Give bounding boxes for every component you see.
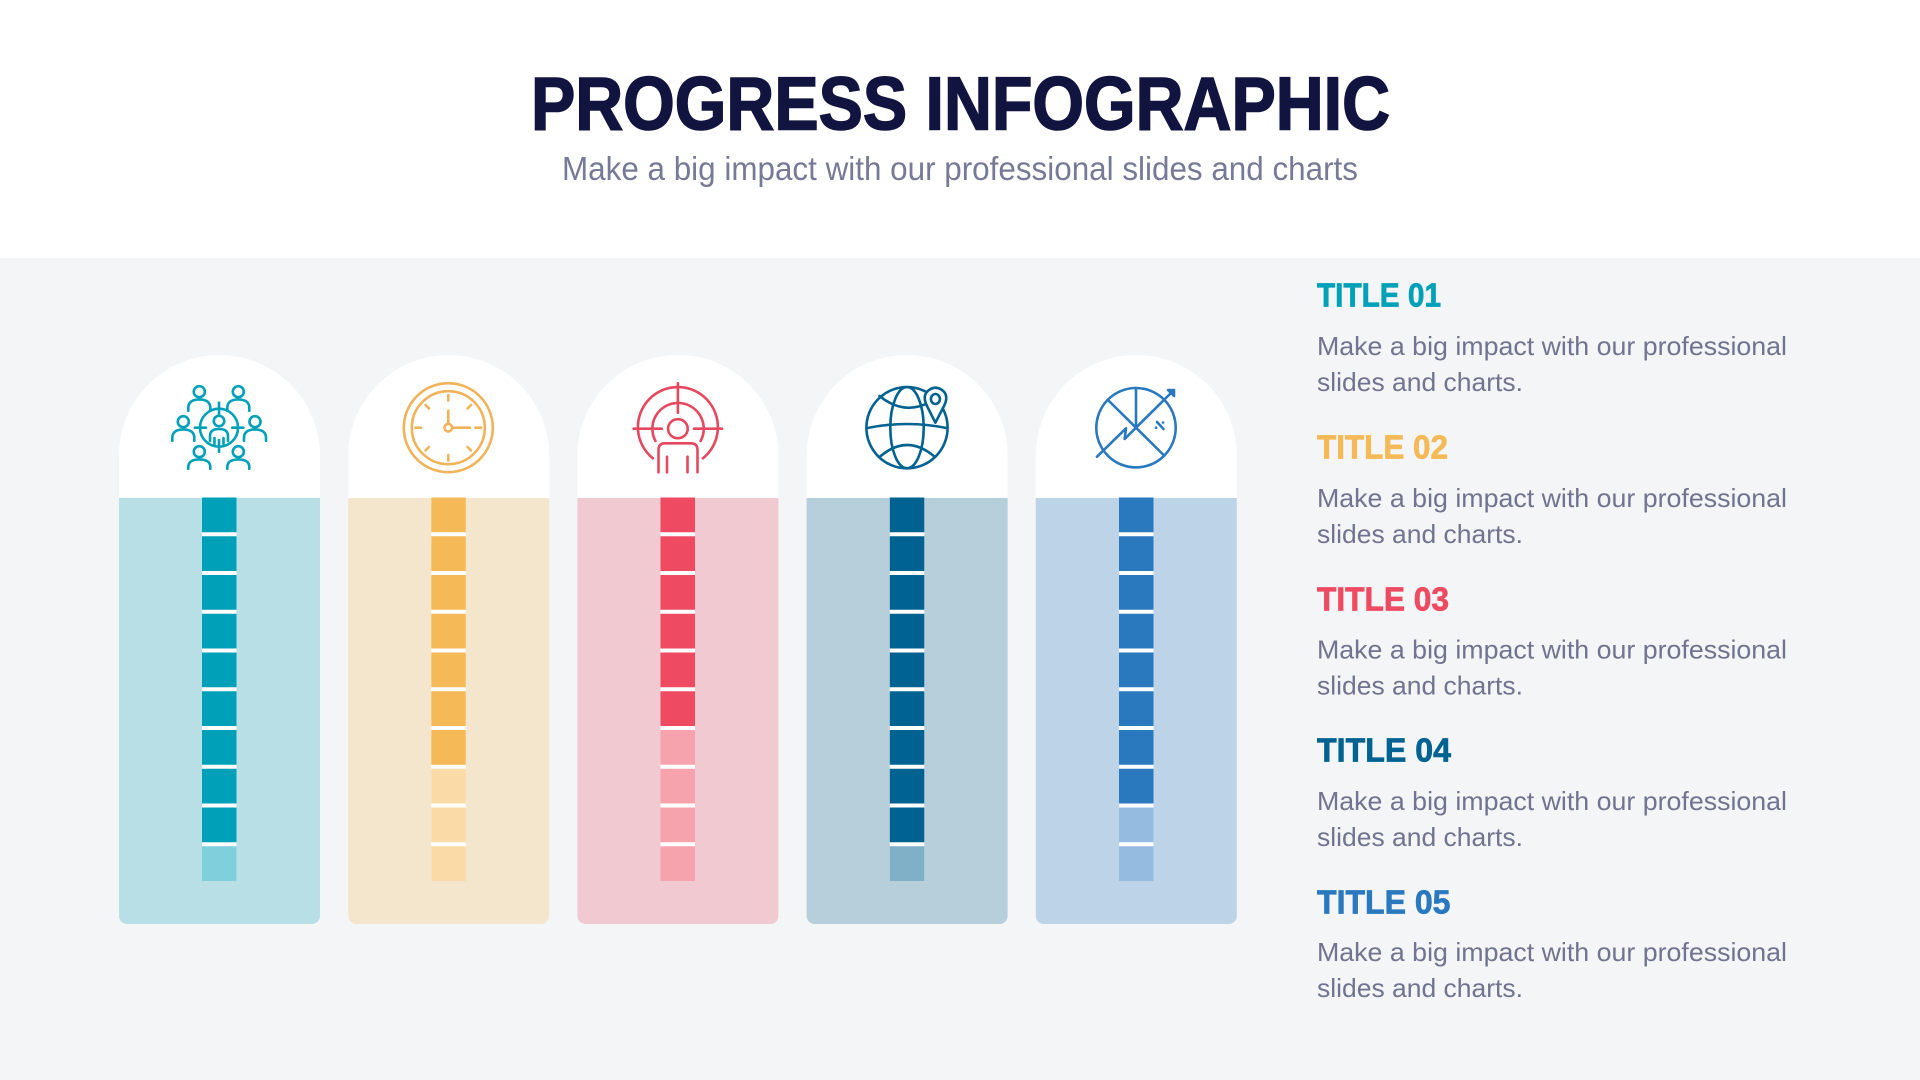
icon: target person [634,383,722,472]
legend item: title 01: TITLE 01 [1317,277,1441,314]
legend item: title 01: Make a big impact with our professional [1317,331,1787,361]
legend item: title 03 [1317,581,1787,700]
icon: globe with pin [866,387,948,468]
legend item: title 02: Make a big impact with our professional [1317,483,1787,513]
title: PROGRESS INFOGRAPHIC [531,62,1390,146]
legend item: title 01: slides and charts. [1317,367,1523,397]
legend item: title 01 [1317,277,1787,397]
legend item: title 02: TITLE 02 [1317,429,1448,466]
icon: clock [404,383,493,472]
subtitle: Make a big impact with our professional slides and charts [562,150,1358,187]
progress bar: column 4, 9 of 10 [890,498,924,881]
progress bar: column 3, 6 of 10 [660,498,695,881]
background band [0,258,1920,1080]
legend item: title 03: slides and charts. [1317,670,1523,700]
panel: column 4 [807,355,1008,924]
panel: column 5 [1036,355,1237,924]
progress bar: column 2, 7 of 10 [431,498,466,881]
legend item: title 04: Make a big impact with our professional [1317,786,1787,816]
panel: column 1 [119,355,320,924]
icon: growth chart in circle [1096,388,1176,467]
legend item: title 03: TITLE 03 [1317,581,1449,618]
legend item: title 02: slides and charts. [1317,519,1523,549]
legend item: title 05: TITLE 05 [1317,883,1450,920]
icon: people target [172,386,266,469]
legend item: title 03: Make a big impact with our professional [1317,634,1787,664]
legend item: title 04: slides and charts. [1317,822,1523,852]
legend item: title 02 [1317,429,1787,549]
legend item: title 04 [1317,732,1787,852]
legend item: title 05: slides and charts. [1317,973,1523,1003]
panel: column 2 [348,355,549,924]
legend item: title 04: TITLE 04 [1317,732,1452,769]
legend item: title 05: Make a big impact with our professional [1317,937,1787,967]
progress bar: column 1, 9 of 10 [202,498,236,881]
panel: column 3 [577,355,778,924]
legend item: title 05 [1317,883,1787,1003]
progress bar: column 5, 8 of 10 [1119,498,1154,881]
